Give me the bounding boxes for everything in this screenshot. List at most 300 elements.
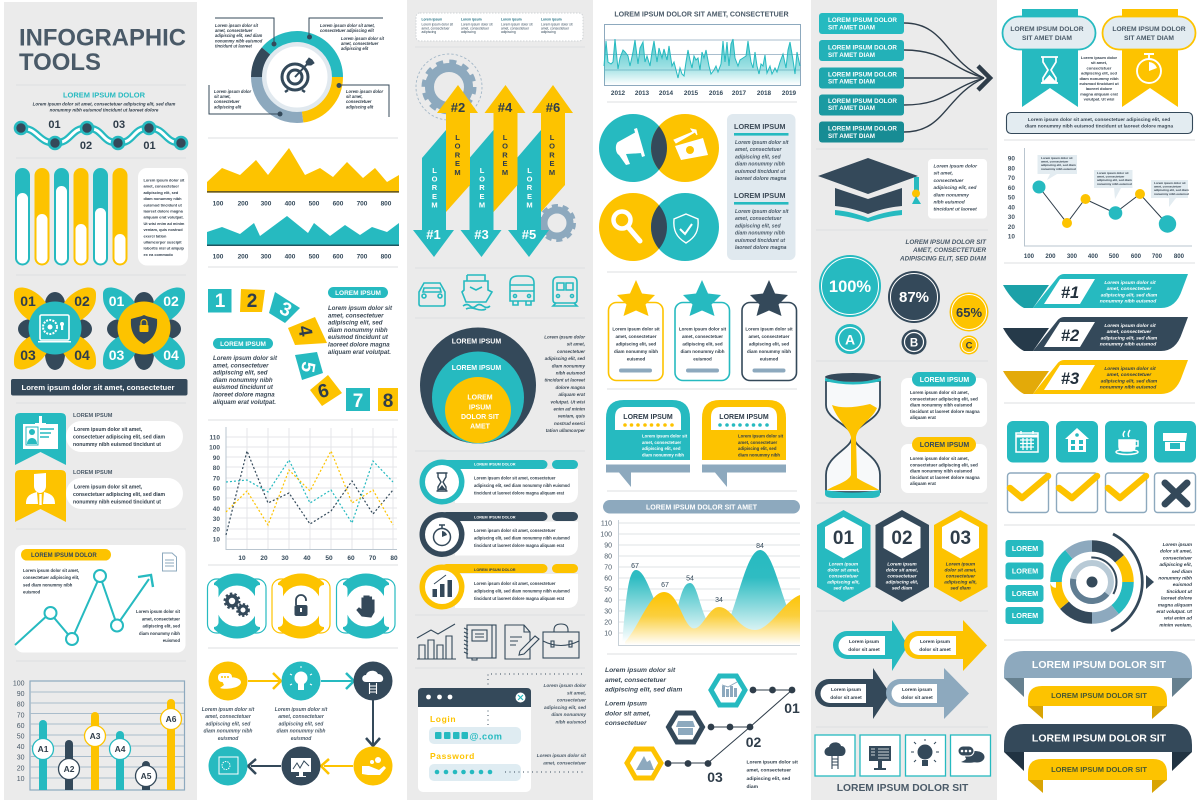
icon: car	[419, 283, 445, 306]
side panel text: amet, consectetuer	[735, 216, 782, 222]
donut text: magna aliquam	[1158, 602, 1192, 607]
banner gray	[1004, 651, 1192, 697]
arrows: up and down pairs: #6	[546, 100, 560, 115]
growth line card: adipiscing elit, sed	[143, 624, 180, 629]
bubble line chart: 20	[1008, 224, 1015, 231]
arrows: up and down pairs: M	[431, 200, 438, 209]
area peaks chart: 67	[661, 582, 669, 589]
icon: store	[1163, 433, 1187, 451]
petal icon: safe: 03	[20, 347, 36, 363]
hex card 01: adipiscing elit,	[827, 580, 860, 584]
area peaks chart: 84	[756, 543, 764, 550]
ribbon centre text: consectetuer	[1087, 65, 1112, 70]
banner #2: #2	[1061, 327, 1079, 345]
bubble line chart: 100	[1024, 253, 1035, 260]
star card yellow	[608, 280, 663, 380]
area peaks chart: 110	[601, 520, 612, 528]
bar chart with markers: A3	[90, 731, 101, 741]
note card yellow pill: LOREM IPSUM	[920, 442, 969, 449]
nested circles	[420, 328, 536, 444]
nested circles: LOREM IPSUM	[452, 338, 501, 346]
dotted line chart: 30	[213, 516, 220, 523]
hexagon staircase timeline	[627, 676, 800, 790]
cap text card: Lorem ipsum dolor	[934, 164, 978, 170]
ribbon teal: SIT AMET DIAM	[1022, 35, 1072, 42]
time series chart: 2013	[635, 90, 650, 97]
dotted line chart: 10	[238, 555, 246, 562]
donut text: consectetuer	[1163, 555, 1193, 560]
target donut: nonummy nibh euismod	[215, 38, 263, 43]
five buttons converging to arrow: LOREM IPSUM DOLOR	[828, 17, 897, 24]
icon: calendar	[1016, 431, 1038, 452]
bubble line chart: 10	[1008, 234, 1015, 240]
dotted line chart: 70	[369, 555, 376, 562]
banner #1: Lorem ipsum dolor sit	[1104, 280, 1156, 286]
side panel text: Lorem ipsum dolor sit	[735, 209, 789, 215]
checkboxes	[1008, 473, 1196, 512]
hex card 03: sed diam	[950, 586, 971, 590]
bar chart with markers: 60	[17, 723, 25, 730]
note card teal pill: tincidunt ut laoreet dolore magna	[910, 409, 980, 414]
icon boxes: LOREM IPSUM DOLOR SIT	[837, 783, 969, 794]
icon: cloud ladder	[824, 742, 846, 769]
flow step: hand coin	[354, 746, 392, 786]
numbered arc blocks	[208, 289, 398, 412]
nested circles: AMET	[470, 424, 491, 430]
dotted line chart: 50	[325, 555, 333, 562]
side panel text: euismod tincidunt ut	[735, 238, 785, 244]
area peaks chart: 67	[631, 563, 639, 570]
growth line card: consectetuer adipiscing elit,	[23, 575, 79, 580]
side panel text: euismod tincidunt ut	[735, 169, 785, 175]
dotted note box: adipiscing	[461, 30, 476, 34]
donut text: laoreet dolore	[1161, 596, 1192, 601]
banner #1	[1003, 274, 1188, 308]
dotted note box: Lorem ipsum dolor sit	[501, 22, 533, 26]
hex card 02: 02	[891, 528, 913, 549]
arrows: up and down pairs: O	[527, 175, 533, 184]
process flow: diam nonummy nibh	[204, 729, 252, 735]
badge: lock	[268, 574, 334, 638]
growth line card: euismod	[23, 590, 41, 595]
star card dark: euismod	[760, 356, 778, 362]
arrows: up and down pairs: #3	[474, 227, 489, 242]
speech card teal: amet, consectetuer	[642, 440, 681, 445]
ribbon centre text: volutpat. Ut wisi	[1084, 97, 1114, 102]
percent badges: 100%	[829, 278, 871, 296]
bubble line chart: Lorem ipsum dolor sit	[1097, 171, 1129, 175]
flow step: chat	[208, 662, 248, 700]
row: stopwatch	[420, 512, 578, 557]
italic heading: AMET, CONSECTETUER	[912, 247, 986, 254]
speech card yellow: amet, consectetuer	[738, 440, 777, 445]
bar chart with markers: 100	[13, 680, 25, 688]
italic notes: adipiscing elit, sed diam	[605, 687, 682, 694]
ribbon centre text: euismod tincidunt ut	[1079, 81, 1119, 86]
area peaks chart: 50	[604, 586, 612, 594]
hex card 03: 03	[950, 528, 971, 549]
percent badges: C	[966, 340, 973, 352]
text card: amet, consectetuer	[144, 184, 179, 189]
star card yellow: amet, consectetuer	[615, 334, 657, 339]
hexagon staircase timeline: Lorem ipsum dolor sit	[746, 760, 798, 766]
dotted note box: amet, consectetuer	[501, 26, 530, 30]
arrows: up and down pairs: E	[479, 192, 485, 201]
hourglass	[825, 373, 881, 498]
banner gray: LOREM IPSUM DOLOR SIT	[1032, 659, 1167, 671]
note card yellow pill: consectetuer adipiscing elit, sed	[910, 462, 978, 467]
petal icon: safe	[14, 288, 96, 370]
note card yellow pill: tincidunt ut laoreet dolore magna	[910, 475, 980, 480]
ribbon centre text: Lorem ipsum dolor	[1081, 55, 1118, 60]
note card teal pill: consectetuer adipiscing elit, sed	[910, 396, 978, 401]
text card: diam nonummy nibh	[144, 196, 182, 201]
growth line card: amet, consectetuer	[142, 616, 180, 621]
text card: ex ea commodo	[144, 252, 174, 257]
cap text card: sit amet,	[934, 171, 953, 177]
process flow: amet, consectetuer	[205, 714, 252, 720]
hex card 01	[817, 510, 870, 602]
bubble line chart: nonummy nibh euismod	[1154, 192, 1189, 196]
icon: chart	[417, 624, 456, 659]
target donut: Lorem ipsum dolor sit	[215, 23, 259, 28]
note card teal pill: diam nonummy nibh euismod	[910, 403, 973, 408]
bar chart with markers: A4	[115, 744, 126, 754]
heading: lorem ipsum dolor	[33, 90, 175, 112]
donut text: euismod	[1173, 582, 1192, 587]
hex card 03: adipiscing elit,	[944, 580, 977, 584]
arrows: up and down pairs: E	[549, 159, 555, 168]
row: bars: Lorem ipsum dolor sit amet, consectetuer	[474, 581, 556, 586]
icon: document pen	[505, 625, 539, 659]
wave timeline: 02	[80, 140, 92, 152]
arrows: up and down pairs: E	[527, 192, 532, 201]
lorem buttons: LOREM	[1012, 611, 1038, 620]
bubble line chart: Lorem ipsum dolor sit	[1041, 156, 1073, 160]
ribbon centre text	[1079, 55, 1119, 102]
area peaks chart: 20	[604, 620, 612, 626]
bubble line chart: 90	[1008, 156, 1015, 162]
row: stopwatch: LOREM IPSUM DOLOR	[474, 516, 516, 520]
numbered arc blocks: 5	[296, 360, 319, 374]
login notes: sit amet,	[567, 690, 586, 695]
icon: monitor list	[869, 746, 891, 770]
target donut: adipiscing elit	[346, 104, 374, 109]
icon: shield	[674, 214, 698, 243]
star card dark: amet, consectetuer	[748, 334, 790, 339]
bubble line chart: 30	[1008, 214, 1015, 221]
pill text block right: adipiscing elit, sed	[328, 320, 383, 327]
note card teal pill	[901, 372, 987, 427]
row: hourglass: tincidunt ut laoreet dolore magna aliquam erat	[474, 490, 565, 495]
card: id badge: Lorem ipsum dolor sit amet,	[74, 427, 143, 433]
bar chart with markers: 70	[17, 712, 25, 719]
arrows: up and down pairs: M	[549, 168, 555, 177]
badge: hand	[334, 574, 398, 638]
arrows: up and down pairs: L	[455, 133, 460, 142]
five buttons converging to arrow: LOREM IPSUM DOLOR	[828, 126, 897, 132]
heading: timeline: LOREM IPSUM DOLOR SIT AMET, CONSECTETUER	[614, 10, 789, 18]
text card	[138, 168, 188, 266]
wave timeline: 01	[48, 119, 61, 131]
title: INFOGRAPHIC	[19, 24, 186, 52]
time series chart: 2017	[732, 90, 747, 97]
teal tiles	[1007, 421, 1196, 462]
side panel text: amet, consectetuer	[735, 147, 782, 153]
dotted note box: Lorem ipsum	[461, 18, 482, 22]
area peaks chart: 80	[604, 554, 612, 560]
card: person: LOREM IPSUM	[73, 470, 113, 476]
pill text block right: amet, consectetuer	[328, 312, 384, 319]
bubble line chart: 800	[1174, 253, 1185, 260]
icon: bus	[510, 276, 534, 305]
hexagon staircase timeline: amet, consectetuer	[746, 768, 791, 774]
star card yellow: Lorem ipsum dolor sit	[612, 326, 660, 332]
arrows: up and down pairs: L	[527, 166, 532, 175]
area peaks chart: 60	[604, 576, 612, 582]
side panel text: laoreet dolore magna	[735, 245, 787, 251]
growth line card: Lorem ipsum dolor sit	[136, 609, 181, 614]
login notes: diam nonummy	[551, 712, 586, 717]
arrows row 2: dolor sit amet	[901, 695, 933, 701]
nested circles: IPSUM	[469, 404, 491, 412]
arrows row 1: dolor sit amet	[848, 647, 880, 653]
bubble line chart: amet, consectetuer	[1154, 185, 1182, 189]
arrows: up and down pairs: R	[549, 150, 555, 159]
donut text	[1156, 542, 1193, 627]
arrows: up and down pairs: O	[549, 142, 555, 151]
login window	[418, 674, 585, 792]
right-aligned text: nostrud exerci	[554, 421, 586, 426]
text card: veniam, quis nostrud	[144, 227, 183, 232]
bubble line chart: 70	[1008, 175, 1015, 182]
numbered arc blocks: 7	[353, 391, 363, 412]
login notes: amet, consectetuer	[543, 760, 587, 765]
caption box: diam nonummy nibh euismod tincidunt ut laoreet dolore magna	[1025, 124, 1173, 130]
right-aligned text: Lorem ipsum dolor	[544, 334, 585, 340]
right-aligned text: aliquam erat	[558, 392, 585, 397]
italic heading	[899, 239, 987, 262]
dotted line chart: 100	[209, 445, 220, 452]
teal area chart: 100	[213, 254, 224, 260]
pill text block right: Lorem ipsum dolor sit	[328, 305, 393, 312]
note card yellow pill: Lorem ipsum dolor sit amet,	[910, 456, 969, 461]
yellow area chart: 300	[261, 200, 272, 208]
area peaks chart: 70	[604, 564, 612, 572]
arrows: up and down pairs: #2	[451, 100, 465, 115]
caption box: Lorem ipsum dolor sit amet, consectetuer adipiscing elit, sed	[1028, 117, 1170, 123]
side panel text: LOREM IPSUM	[734, 191, 785, 200]
wave timeline	[15, 119, 187, 152]
connector lines	[209, 18, 389, 117]
pill text block left: LOREM IPSUM	[220, 341, 266, 348]
process flow: diam nonummy nibh	[277, 729, 325, 735]
banner yellow 1	[1028, 686, 1167, 719]
petal icon: safe: 04	[74, 347, 90, 363]
side panel text: diam nonummy nibh	[735, 231, 785, 237]
arrows: up and down pairs: O	[502, 142, 508, 151]
bar chart with markers: A2	[64, 764, 75, 774]
petal icon: shield: 01	[109, 293, 124, 309]
process flow: euismod	[291, 736, 312, 742]
growth line card: Lorem ipsum dolor sit amet,	[23, 568, 79, 573]
arrows: up and down pairs: M	[454, 168, 461, 177]
dotted line chart: 60	[213, 486, 220, 492]
pill text block left: Lorem ipsum dolor sit	[213, 355, 278, 362]
dark caption bar	[11, 379, 188, 396]
yellow area chart	[207, 148, 399, 208]
numbered arc blocks: 2	[247, 291, 257, 312]
arrows: up and down pairs: M	[502, 168, 508, 177]
teal area chart: 500	[309, 254, 320, 260]
target donut: consectetuer	[346, 99, 372, 104]
banner yellow 1: LOREM IPSUM DOLOR SIT	[1051, 691, 1147, 700]
note card yellow pill	[901, 437, 987, 493]
target donut: adipiscing elit	[341, 46, 369, 51]
text card: exerci tation	[144, 233, 167, 238]
target donut: consectetuer adipiscing elit	[320, 28, 375, 33]
five buttons converging to arrow: LOREM IPSUM DOLOR	[828, 44, 897, 52]
petal icon: shield: 04	[163, 347, 179, 363]
speech card teal: LOREM IPSUM	[623, 414, 673, 421]
teal area chart: 800	[381, 254, 392, 260]
bubble line chart: 700	[1152, 253, 1163, 260]
time series chart: 2016	[709, 90, 724, 97]
icon: ship	[462, 275, 492, 310]
star card yellow: diam nonummy nibh	[614, 349, 658, 354]
dotted line chart: 20	[213, 526, 220, 533]
arrows: up and down pairs: #4	[498, 100, 513, 115]
dotted note box: amet, consectetuer	[461, 26, 490, 30]
target donut: amet, consectetuer	[215, 28, 253, 33]
gear top	[416, 54, 482, 120]
text card: adipiscing elit, sed	[144, 190, 179, 195]
cap text card: tincidunt ut laoreet	[934, 207, 977, 213]
bar chart with markers	[13, 680, 184, 790]
yellow area chart: 700	[357, 200, 368, 208]
dotted note box: Lorem ipsum dolor sit	[422, 22, 453, 26]
text card: aliquam erat volutpat.	[144, 215, 184, 220]
cap text card: consectetuer	[934, 178, 964, 184]
dotted line chart: 80	[213, 465, 220, 472]
title: TOOLS	[19, 49, 101, 76]
area peaks chart	[600, 520, 800, 646]
text card: Ut wisi enim ad minim	[144, 221, 185, 226]
ribbon yellow: LOREM IPSUM DOLOR	[1112, 26, 1186, 33]
icon: house	[1065, 428, 1089, 452]
pill text block left: amet, consectetuer	[213, 362, 269, 369]
percent badges: 87%	[899, 289, 929, 306]
star card dark: adipiscing elit, sed	[749, 342, 789, 346]
bubble line chart: Lorem ipsum dolor sit	[1154, 181, 1186, 185]
star card dark	[742, 280, 796, 380]
text card: euismod tincidunt ut	[144, 202, 182, 207]
right-aligned text: consectetuer	[557, 349, 585, 354]
speech card teal: Lorem ipsum dolor sit	[642, 434, 688, 438]
side panel text	[727, 114, 796, 260]
arrows: up and down pairs: L	[480, 166, 485, 175]
bubble line chart: adipiscing elit, sed diam	[1041, 163, 1076, 167]
process flow	[202, 662, 392, 786]
icon: money	[674, 129, 708, 160]
bubble line chart: amet, consectetuer	[1041, 160, 1069, 164]
arrows: up and down pairs: M	[526, 200, 533, 209]
hex card 02: Lorem ipsum	[887, 562, 917, 566]
hexagon staircase timeline: adipiscing elit, sed	[746, 776, 790, 782]
target donut: sit amet,	[346, 94, 363, 99]
five buttons converging to arrow: SIT AMET DIAM	[828, 24, 875, 31]
area peaks chart: 100	[600, 532, 612, 538]
dotted note box: amet, consectetuer	[541, 26, 570, 30]
teal area chart: 600	[333, 254, 344, 260]
dotted note box: Lorem ipsum	[501, 18, 522, 22]
italic notes: amet, consectetuer	[605, 677, 666, 684]
growth line card: sed diam nonummy nibh	[23, 582, 73, 587]
right-aligned text: tincidunt ut laoreet	[544, 378, 586, 383]
yellow area chart: 400	[285, 200, 296, 208]
teal area chart	[207, 216, 399, 260]
bubble line chart: 500	[1109, 253, 1120, 260]
lorem buttons: LOREM	[1012, 544, 1038, 553]
banner #3: amet, consectetuer	[1107, 372, 1152, 378]
side panel text: adipiscing elit, sed	[735, 223, 781, 229]
speech card yellow: diam nonummy nibh	[738, 452, 780, 457]
target donut: adipiscing elit	[214, 104, 242, 109]
bubble line chart: 300	[1067, 253, 1078, 260]
banner yellow 2: LOREM IPSUM DOLOR SIT	[1051, 765, 1147, 774]
percent badges: B	[910, 338, 918, 350]
arrows: up and down pairs: E	[502, 159, 508, 168]
arrows: up and down pairs: R	[479, 183, 485, 192]
dotted note box: adipiscing	[501, 30, 516, 34]
row: hourglass: Lorem ipsum dolor sit amet, consectetuer	[474, 476, 556, 480]
percent badges	[819, 255, 988, 354]
arrows row 1	[833, 620, 987, 671]
dotted note box: Lorem ipsum dolor sit	[541, 22, 573, 26]
bubble line chart: 600	[1131, 253, 1142, 260]
card: person	[15, 470, 183, 522]
right-aligned text	[544, 334, 586, 433]
italic notes: dolor sit amet,	[605, 710, 651, 717]
italic notes: consectetuer	[605, 720, 647, 727]
flow step: cloud	[354, 662, 392, 700]
speech card teal: adipiscing elit, sed	[642, 446, 681, 451]
hex card 01: Lorem ipsum	[829, 562, 858, 566]
caption box	[1006, 112, 1192, 134]
star card dark: Lorem ipsum dolor sit	[745, 326, 793, 332]
banner #2: nonummy nibh euismod	[1100, 342, 1157, 348]
pill text block left	[213, 338, 278, 406]
right-aligned text: diam nonummy	[552, 363, 585, 368]
text card: lobortis nisl ut aliquip	[144, 246, 185, 251]
speech card yellow: adipiscing elit, sed	[738, 446, 777, 451]
radial donut	[1056, 534, 1154, 631]
arrows: up and down pairs: O	[432, 175, 438, 184]
donut text: nonummy nibh	[1158, 576, 1192, 580]
dotted line chart: 80	[390, 555, 398, 562]
arrows: up and down pairs: L	[550, 133, 555, 142]
graduation cap	[818, 158, 921, 222]
row: hourglass	[420, 460, 578, 504]
target donut: Lorem ipsum dolor sit amet,	[320, 23, 375, 28]
hex card 02: dolor sit amet,	[886, 568, 918, 572]
icon: coffee	[1116, 430, 1138, 454]
nested circles: LOREM IPSUM	[452, 365, 501, 372]
icon: document	[162, 553, 176, 571]
login window: Password	[430, 751, 475, 761]
star card yellow: adipiscing elit, sed	[616, 342, 656, 346]
bar chart with markers: 10	[17, 776, 25, 783]
